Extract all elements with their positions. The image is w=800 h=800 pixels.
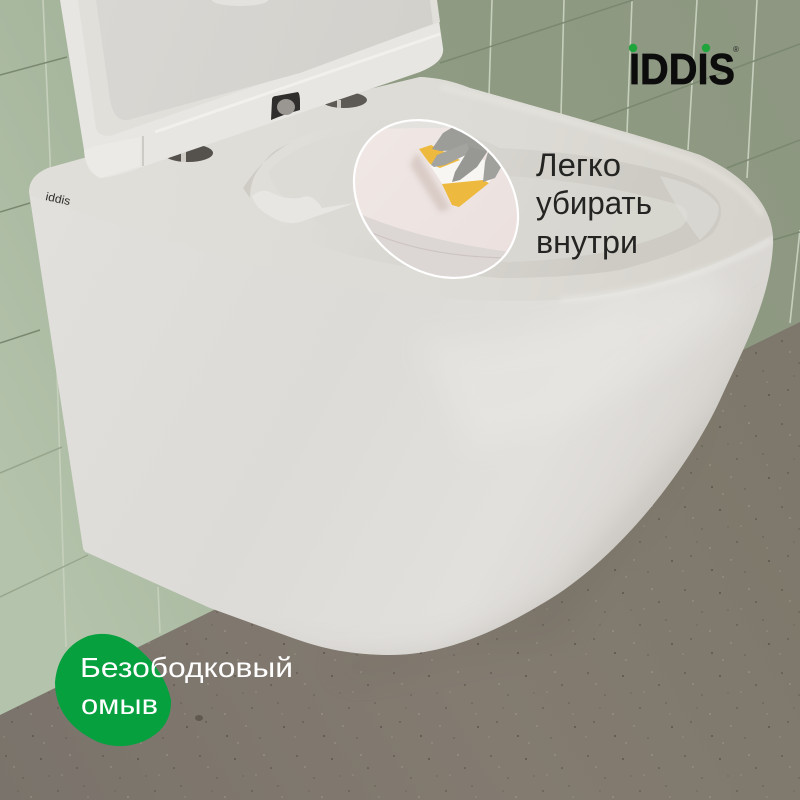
glove finger lower	[452, 147, 487, 182]
sponge top	[419, 145, 460, 168]
IDDIS logo: IDDIS	[629, 45, 735, 94]
lid hinge slot	[271, 92, 300, 120]
bowl water well	[268, 128, 688, 262]
small logo on ceramic: iddis	[44, 191, 72, 208]
green badge: rimless flush: Безободковый	[80, 652, 293, 683]
foam	[428, 156, 490, 184]
callout: easy to clean inside: Легко	[536, 147, 621, 183]
toilet lid	[60, 0, 443, 178]
glove finger middle	[431, 150, 468, 167]
glove thumb	[483, 152, 501, 182]
callout: easy to clean inside	[536, 147, 652, 260]
callout: easy to clean inside: убирать	[536, 185, 652, 221]
sponge bottom	[442, 180, 489, 207]
right inner rim detail	[660, 176, 719, 240]
seat hinges	[163, 92, 367, 162]
rear rinse outlet	[252, 191, 355, 223]
glove finger top	[432, 128, 488, 152]
sponge shadow	[410, 152, 450, 212]
floor	[0, 322, 800, 800]
green badge: rimless flush	[55, 634, 293, 746]
green badge: rimless flush: омыв	[81, 689, 158, 720]
ceramic body	[29, 77, 773, 655]
callout: easy to clean inside: внутри	[536, 224, 638, 260]
IDDIS logo: ®	[733, 45, 739, 54]
toilet bowl	[29, 77, 774, 655]
inset circle: cleaning close-up	[352, 119, 520, 279]
body shading and highlights	[30, 77, 772, 655]
bowl opening	[247, 120, 721, 278]
